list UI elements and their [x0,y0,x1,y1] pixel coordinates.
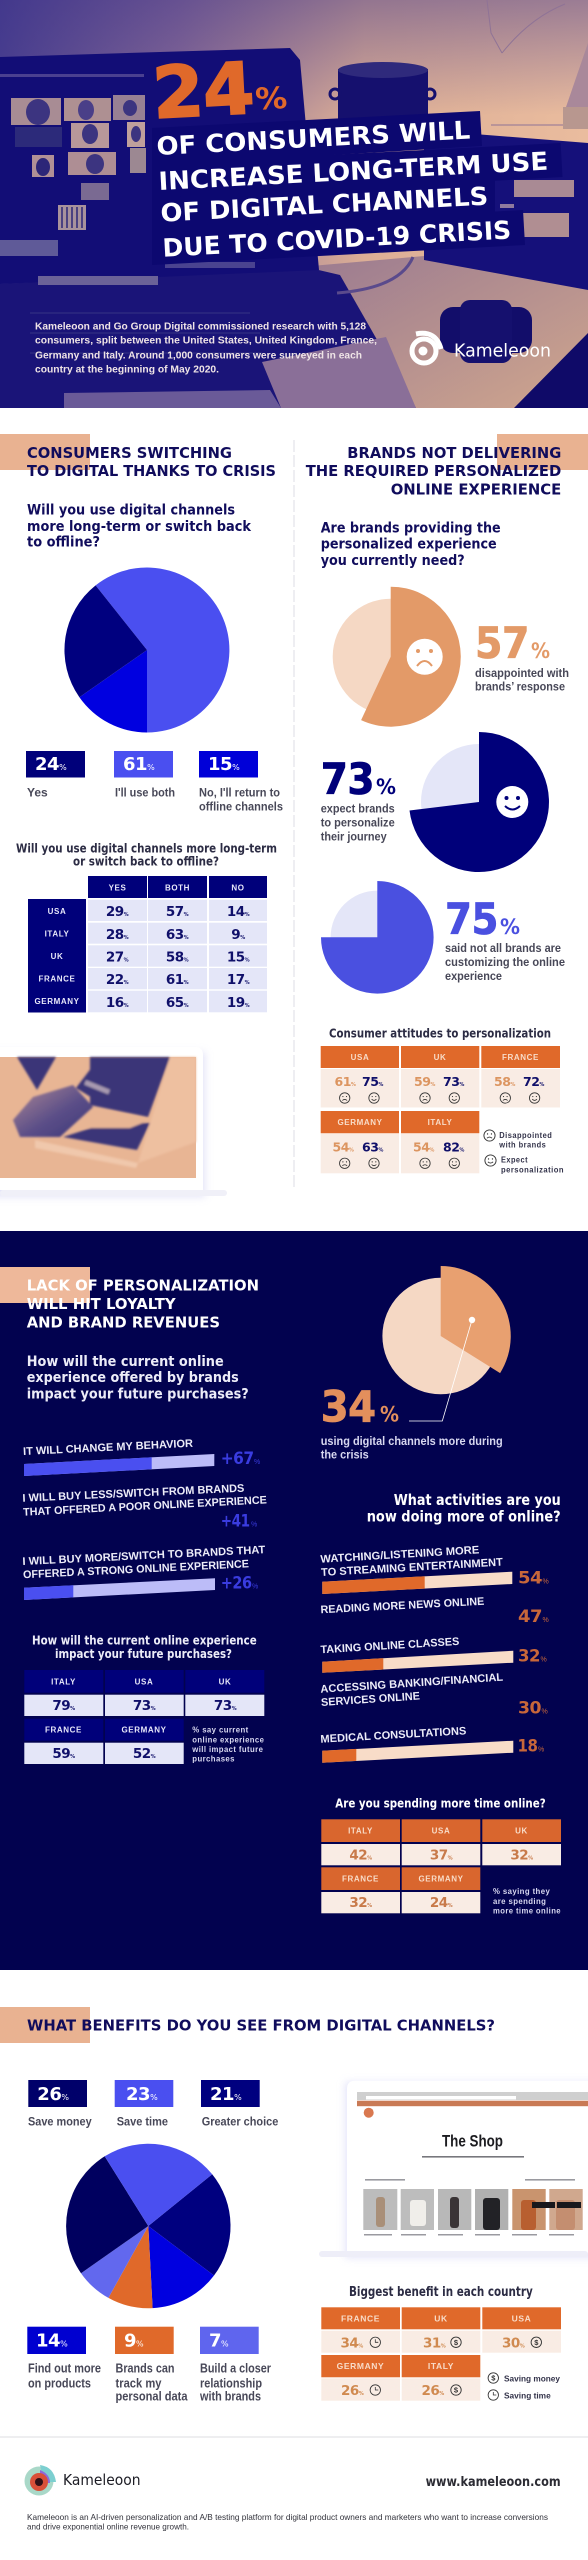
center divider [293,440,295,1190]
website address: www.kameleoon.com [426,2475,561,2490]
attitudes table: 59% [414,1074,435,1089]
time online table: USA [432,1827,450,1836]
question: Will you use digital channels [27,503,235,519]
stat: both: 61% [123,754,155,775]
heading: CONSUMERS SWITCHING [27,444,232,462]
label: news 47 percent: READING MORE NEWS ONLINE [320,1596,485,1616]
attitudes legend [484,1130,564,1175]
impact table: GERMANY [121,1725,167,1734]
company description: and drive exponential online revenue growth. [27,2522,189,2532]
stat: greater choice: Greater choice [202,2115,279,2129]
heading: WHAT BENEFITS DO YOU SEE FROM DIGITAL CHANNELS? [27,2017,495,2035]
label: buy less 41 percent: +41 [221,1512,250,1531]
biggest benefit table: 26% [341,2383,364,2399]
bar: medical 18 percent: % [538,1747,544,1754]
biggest benefit table: 26% [422,2383,444,2399]
table heading: or switch back to offline? [73,855,219,869]
stat: find out more: Find out more [28,2362,101,2376]
stat: closer relationship: relationship [200,2376,262,2390]
heading: AND BRAND REVENUES [27,1314,220,1332]
question: impact your future purchases? [27,1387,249,1403]
biggest benefit legend: $ [491,2374,496,2383]
biggest benefit table: FRANCE [341,2314,380,2324]
impact table note: % say current [192,1726,249,1735]
country table: 16% [106,995,129,1011]
stat: track data: Brands can [116,2362,174,2376]
bar: online classes 32 percent: TAKING ONLINE CLASSES [320,1636,460,1656]
heading [27,1277,259,1332]
stat: 34 percent: the crisis [321,1448,369,1462]
heading accent [497,434,588,470]
country table: 27% [106,950,129,966]
biggest benefit table: $ [534,2338,539,2347]
country table: USA [48,907,66,916]
stat: save money: Save money [28,2115,92,2129]
attitudes table: ITALY [428,1118,452,1127]
impact table: ITALY [51,1677,76,1686]
country table: 22% [106,972,129,988]
country table [28,876,267,1012]
stat: closer relationship: with brands [199,2390,261,2404]
country table: 65% [166,995,189,1011]
attitudes table: 58% [494,1074,515,1089]
impact table: 79% [52,1698,75,1714]
stat: yes [26,751,85,800]
stat: 73 percent: % [376,775,396,799]
country table: 15% [227,950,250,966]
time online note: are spending [493,1897,546,1906]
pie: 34 percent using digital more [382,1266,511,1421]
heading: WILL HIT LOYALTY [27,1295,177,1313]
country table: 9% [231,927,245,943]
attitudes legend: Expect [501,1156,528,1165]
stat: track data: personal data [116,2390,188,2404]
stat: both [114,751,175,800]
headline text on angled bands: INCREASE LONG-TERM USE [158,147,549,196]
question: now doing more of online? [367,1508,561,1526]
stat: 75 percent: said not all brands are [445,941,561,955]
time online table: 42% [349,1847,372,1863]
label: banking 30 percent [320,1672,548,1717]
laptop illustration: the shop website: The Shop [442,2132,503,2151]
biggest benefit table: 30% [502,2335,525,2351]
impact table: USA [135,1677,153,1686]
time online table: UK [515,1827,528,1836]
stat: save time: 23% [126,2084,158,2105]
pie chart: benefits [66,2144,231,2308]
stat: 57 percent: % [531,639,550,663]
country table: 63% [166,927,189,943]
stat: 73 percent: to personalize [321,816,395,830]
stat: find out more: 14% [36,2331,68,2352]
question: experience offered by brands [27,1370,239,1386]
question: you currently need? [321,553,465,569]
attitudes legend: personalization [501,1166,564,1175]
attitudes table: FRANCE [502,1053,539,1062]
table heading [16,842,277,869]
laptop illustration: the shop website [319,2081,588,2258]
heading accent [0,1267,90,1303]
headline text on angled bands [152,111,562,265]
question [321,521,501,569]
impact table note: online experience [192,1735,265,1744]
panel: consumers switching to digital [0,434,283,1197]
biggest benefit table: USA [512,2314,531,2324]
stat: 34 percent [321,1383,503,1462]
stat: track data [115,2327,188,2404]
bar: buy more 26 percent: OFFERED A STRONG ONLINE EXPERIENCE [23,1558,249,1581]
panel: lack of personalization [0,1267,267,1764]
attitudes table: 54% [413,1139,434,1154]
heading accent [0,2007,90,2043]
bar: medical 18 percent [320,1725,544,1763]
heading [306,444,561,499]
country table: 28% [106,927,129,943]
bar: medical 18 percent: 18 [518,1737,538,1756]
table heading: impact your future purchases? [55,1647,232,1661]
hero photo: desk with laptop, speaker and tablet [0,0,588,408]
country table: 14% [227,904,250,920]
stat: 57 percent [475,619,569,694]
attitudes table: 61% [334,1074,356,1089]
stat: greater choice: 21% [210,2084,242,2105]
time online note: % saying they [493,1887,550,1896]
stat: no [199,751,283,814]
pie: 75 percent not customizing [321,881,434,994]
bar: streaming 54 percent: % [542,1578,549,1585]
table heading: Will you use digital channels more long-term [16,842,277,856]
hero banner [0,0,588,408]
stat: save money: 26% [37,2084,69,2105]
heading: BRANDS NOT DELIVERING [347,444,561,462]
heading [27,444,276,480]
stat: 75 percent: % [500,915,520,939]
time online table: 32% [349,1895,372,1911]
stat: yes: Yes [27,786,48,800]
footer [24,2465,561,2532]
bar: streaming 54 percent: 54 [518,1568,542,1587]
label: news 47 percent: % [542,1617,549,1624]
stat: 73 percent: their journey [321,830,387,844]
bar: buy more 26 percent: % [252,1583,258,1590]
question [367,1491,561,1526]
label: buy less 41 percent [22,1483,267,1531]
bar: streaming 54 percent: TO STREAMING ENTERTAINMENT [321,1557,503,1579]
country table: GERMANY [34,997,80,1006]
impact table: UK [219,1677,231,1686]
laptop illustration: online card payment [0,1047,227,1197]
biggest benefit table: 31% [423,2335,446,2351]
question: How will the current online [27,1354,224,1370]
biggest benefit heading: Biggest benefit in each country [349,2284,533,2300]
company description [27,2512,548,2532]
attitudes table: UK [434,1053,446,1062]
impact table: 52% [133,1746,156,1762]
label: banking 30 percent: 30 [518,1698,541,1717]
company description: Kameleoon is an AI-driven personalization and A/B testing platform for digital product owners and marketers who want to increase conversions [27,2512,548,2522]
biggest benefit legend: Saving time [504,2391,551,2401]
impact table note [191,1726,265,1764]
biggest benefit table: $ [454,2338,459,2347]
attitudes table: USA [351,1053,369,1062]
question: to offline? [27,535,100,551]
biggest benefit legend: Saving money [504,2373,560,2383]
bar: streaming 54 percent: WATCHING/LISTENING MORE [320,1544,480,1566]
question: Are brands providing the [321,521,501,537]
label: news 47 percent: 47 [518,1607,542,1626]
bar: streaming 54 percent [320,1544,549,1594]
stat: find out more: on products [28,2376,91,2390]
stat: find out more [27,2327,101,2390]
impact table: 73% [214,1698,237,1714]
label: buy less 41 percent: % [251,1522,257,1529]
bar: online classes 32 percent: % [540,1657,547,1664]
impact table: 59% [52,1746,75,1762]
country table: 19% [227,995,250,1011]
headline statistic: 24 [151,47,256,135]
bar: change my behavior 67 percent: % [254,1459,260,1466]
time online table: 37% [430,1847,453,1863]
hero intro text: Kameleoon and Go Group Digital commissioned research with 5,128 [35,320,366,332]
dark section background [0,1231,588,1970]
label: banking 30 percent: % [542,1708,548,1715]
biggest benefit table: 34% [340,2335,363,2351]
stat: 73 percent: expect brands [321,802,395,816]
footer Kameleoon logo: Kameleoon [63,2471,141,2489]
stat: yes: 24% [35,754,67,775]
time online table: 32% [510,1847,533,1863]
country table: UK [51,952,63,961]
pie: 73 percent expect personalization [410,732,549,872]
impact table: 73% [133,1698,156,1714]
attitudes table: 54% [332,1139,354,1154]
country table: 57% [166,904,189,920]
attitudes table: 63% [362,1139,383,1154]
country table: 61% [166,972,189,988]
country table: YES [109,884,126,892]
biggest benefit table: ITALY [428,2361,454,2371]
country table: 17% [227,972,250,988]
footer Kameleoon logo [24,2465,141,2496]
stat: closer relationship [199,2327,271,2404]
attitudes legend: with brands [498,1141,546,1150]
stat: 57 percent: 57 [475,619,529,669]
hero intro text [35,320,377,376]
panel: brands not delivering [306,434,588,1175]
table heading: How will the current online experience [32,1634,257,1648]
stat: closer relationship: Build a closer [200,2362,271,2376]
time online note: more time online [493,1906,561,1915]
stat: 34 percent: 34 [321,1383,376,1433]
stat: 34 percent: using digital channels more during [321,1434,503,1448]
bar: medical 18 percent: MEDICAL CONSULTATIONS [320,1725,467,1746]
pie chart: digital channel intent [64,568,229,732]
stat: 75 percent [445,895,565,983]
stat: no: 15% [208,754,240,775]
stat: 75 percent: 75 [445,895,498,945]
label: banking 30 percent: SERVICES ONLINE [321,1690,420,1709]
country table: 29% [106,904,129,920]
attitudes legend: Disappointed [499,1131,552,1140]
heading: ONLINE EXPERIENCE [391,481,561,499]
panel: benefits of digital channels [0,2007,588,2404]
impact table [24,1670,264,1764]
attitudes table: 73% [443,1074,464,1089]
attitudes table: 75% [362,1074,383,1089]
biggest benefit table: UK [434,2314,448,2324]
question: more long-term or switch back [27,519,252,535]
question [27,503,252,551]
country table: BOTH [165,884,190,892]
label: buy less 41 percent: THAT OFFERED A POOR ONLINE EXPERIENCE [23,1494,267,1519]
impact table note: will impact future [191,1745,264,1754]
country table: NO [231,884,245,892]
bar: buy more 26 percent: +26 [221,1573,252,1592]
stat: 75 percent: experience [445,969,502,983]
headline text on angled bands: OF DIGITAL CHANNELS [160,182,489,228]
country table: ITALY [45,930,69,938]
stat: track data: 9% [124,2331,144,2352]
country table: FRANCE [39,974,76,984]
headline text on angled bands: DUE TO COVID-19 CRISIS [162,215,512,263]
table heading [32,1634,257,1661]
time online table [321,1819,561,1913]
stat: both: I'll use both [115,786,175,800]
stat: greater choice [201,2080,279,2129]
time online table: ITALY [348,1827,373,1836]
label: buy less 41 percent: I WILL BUY LESS/SWITCH FROM BRANDS [22,1483,245,1505]
label: news 47 percent [320,1596,549,1626]
label: banking 30 percent: ACCESSING BANKING/FINANCIAL [320,1672,504,1696]
stat: 73 percent: 73 [321,755,374,805]
headline statistic: % [254,81,288,118]
heading: LACK OF PERSONALIZATION [27,1277,259,1295]
stat: save money [28,2080,92,2129]
stat: save time [115,2080,173,2129]
biggest benefit legend [488,2373,560,2401]
bar: buy more 26 percent [22,1544,266,1600]
biggest benefit table: $ [454,2386,459,2395]
heading: THE REQUIRED PERSONALIZED [306,462,561,480]
table heading: Are you spending more time online? [335,1795,546,1810]
bar: online classes 32 percent [320,1636,547,1673]
stat: closer relationship: 7% [209,2331,229,2352]
impact table note: purchases [192,1755,235,1764]
question: personalized experience [321,537,497,553]
country table: 58% [166,950,189,966]
attitudes table: 72% [523,1074,544,1089]
biggest benefit table [321,2307,561,2401]
pie: 57 percent disappointed [333,587,461,727]
heading: TO DIGITAL THANKS TO CRISIS [27,462,276,480]
stat: save time: Save time [117,2115,168,2129]
footer divider [0,2436,588,2438]
stat: no: No, I'll return to [199,786,280,800]
stat: no: offline channels [199,800,283,814]
panel: using digital channels more [320,1266,561,1915]
headline text on angled bands: OF CONSUMERS WILL [156,116,471,161]
bar: online classes 32 percent: 32 [518,1647,540,1666]
stat: track data: track my [116,2376,162,2390]
time online note [493,1887,561,1915]
question [27,1354,249,1403]
attitudes table: 82% [443,1139,464,1154]
stat: 75 percent: customizing the online [445,955,565,969]
bar: buy more 26 percent: I WILL BUY MORE/SWITCH TO BRANDS THAT [22,1544,266,1568]
hero Kameleoon logo: Kameleoon [454,341,551,362]
bar: change my behavior 67 percent: +67 [221,1449,254,1468]
time online table: GERMANY [418,1875,464,1884]
hero Kameleoon logo [412,333,551,363]
stat: 73 percent [321,755,396,844]
bar: change my behavior 67 percent [23,1438,260,1476]
attitudes table [321,1046,560,1173]
time online table: 24% [430,1895,453,1911]
stat: 57 percent: disappointed with [475,666,569,680]
impact table: FRANCE [45,1725,82,1734]
bar: change my behavior 67 percent: IT WILL CHANGE MY BEHAVIOR [23,1438,193,1458]
attitudes heading: Consumer attitudes to personalization [329,1026,551,1040]
stat: 34 percent: % [380,1403,399,1427]
stat: 57 percent: brands’ response [475,680,565,694]
hero intro text: Germany and Italy. Around 1,000 consumers were surveyed in each [35,349,362,361]
attitudes table: GERMANY [337,1118,383,1127]
time online table: FRANCE [342,1875,379,1884]
question: What activities are you [394,1491,561,1509]
hero intro text: consumers, split between the United States, United Kingdom, France, [35,334,377,346]
heading accent [0,434,90,470]
biggest benefit table: GERMANY [337,2361,384,2371]
hero intro text: country at the beginning of May 2020. [35,364,219,376]
